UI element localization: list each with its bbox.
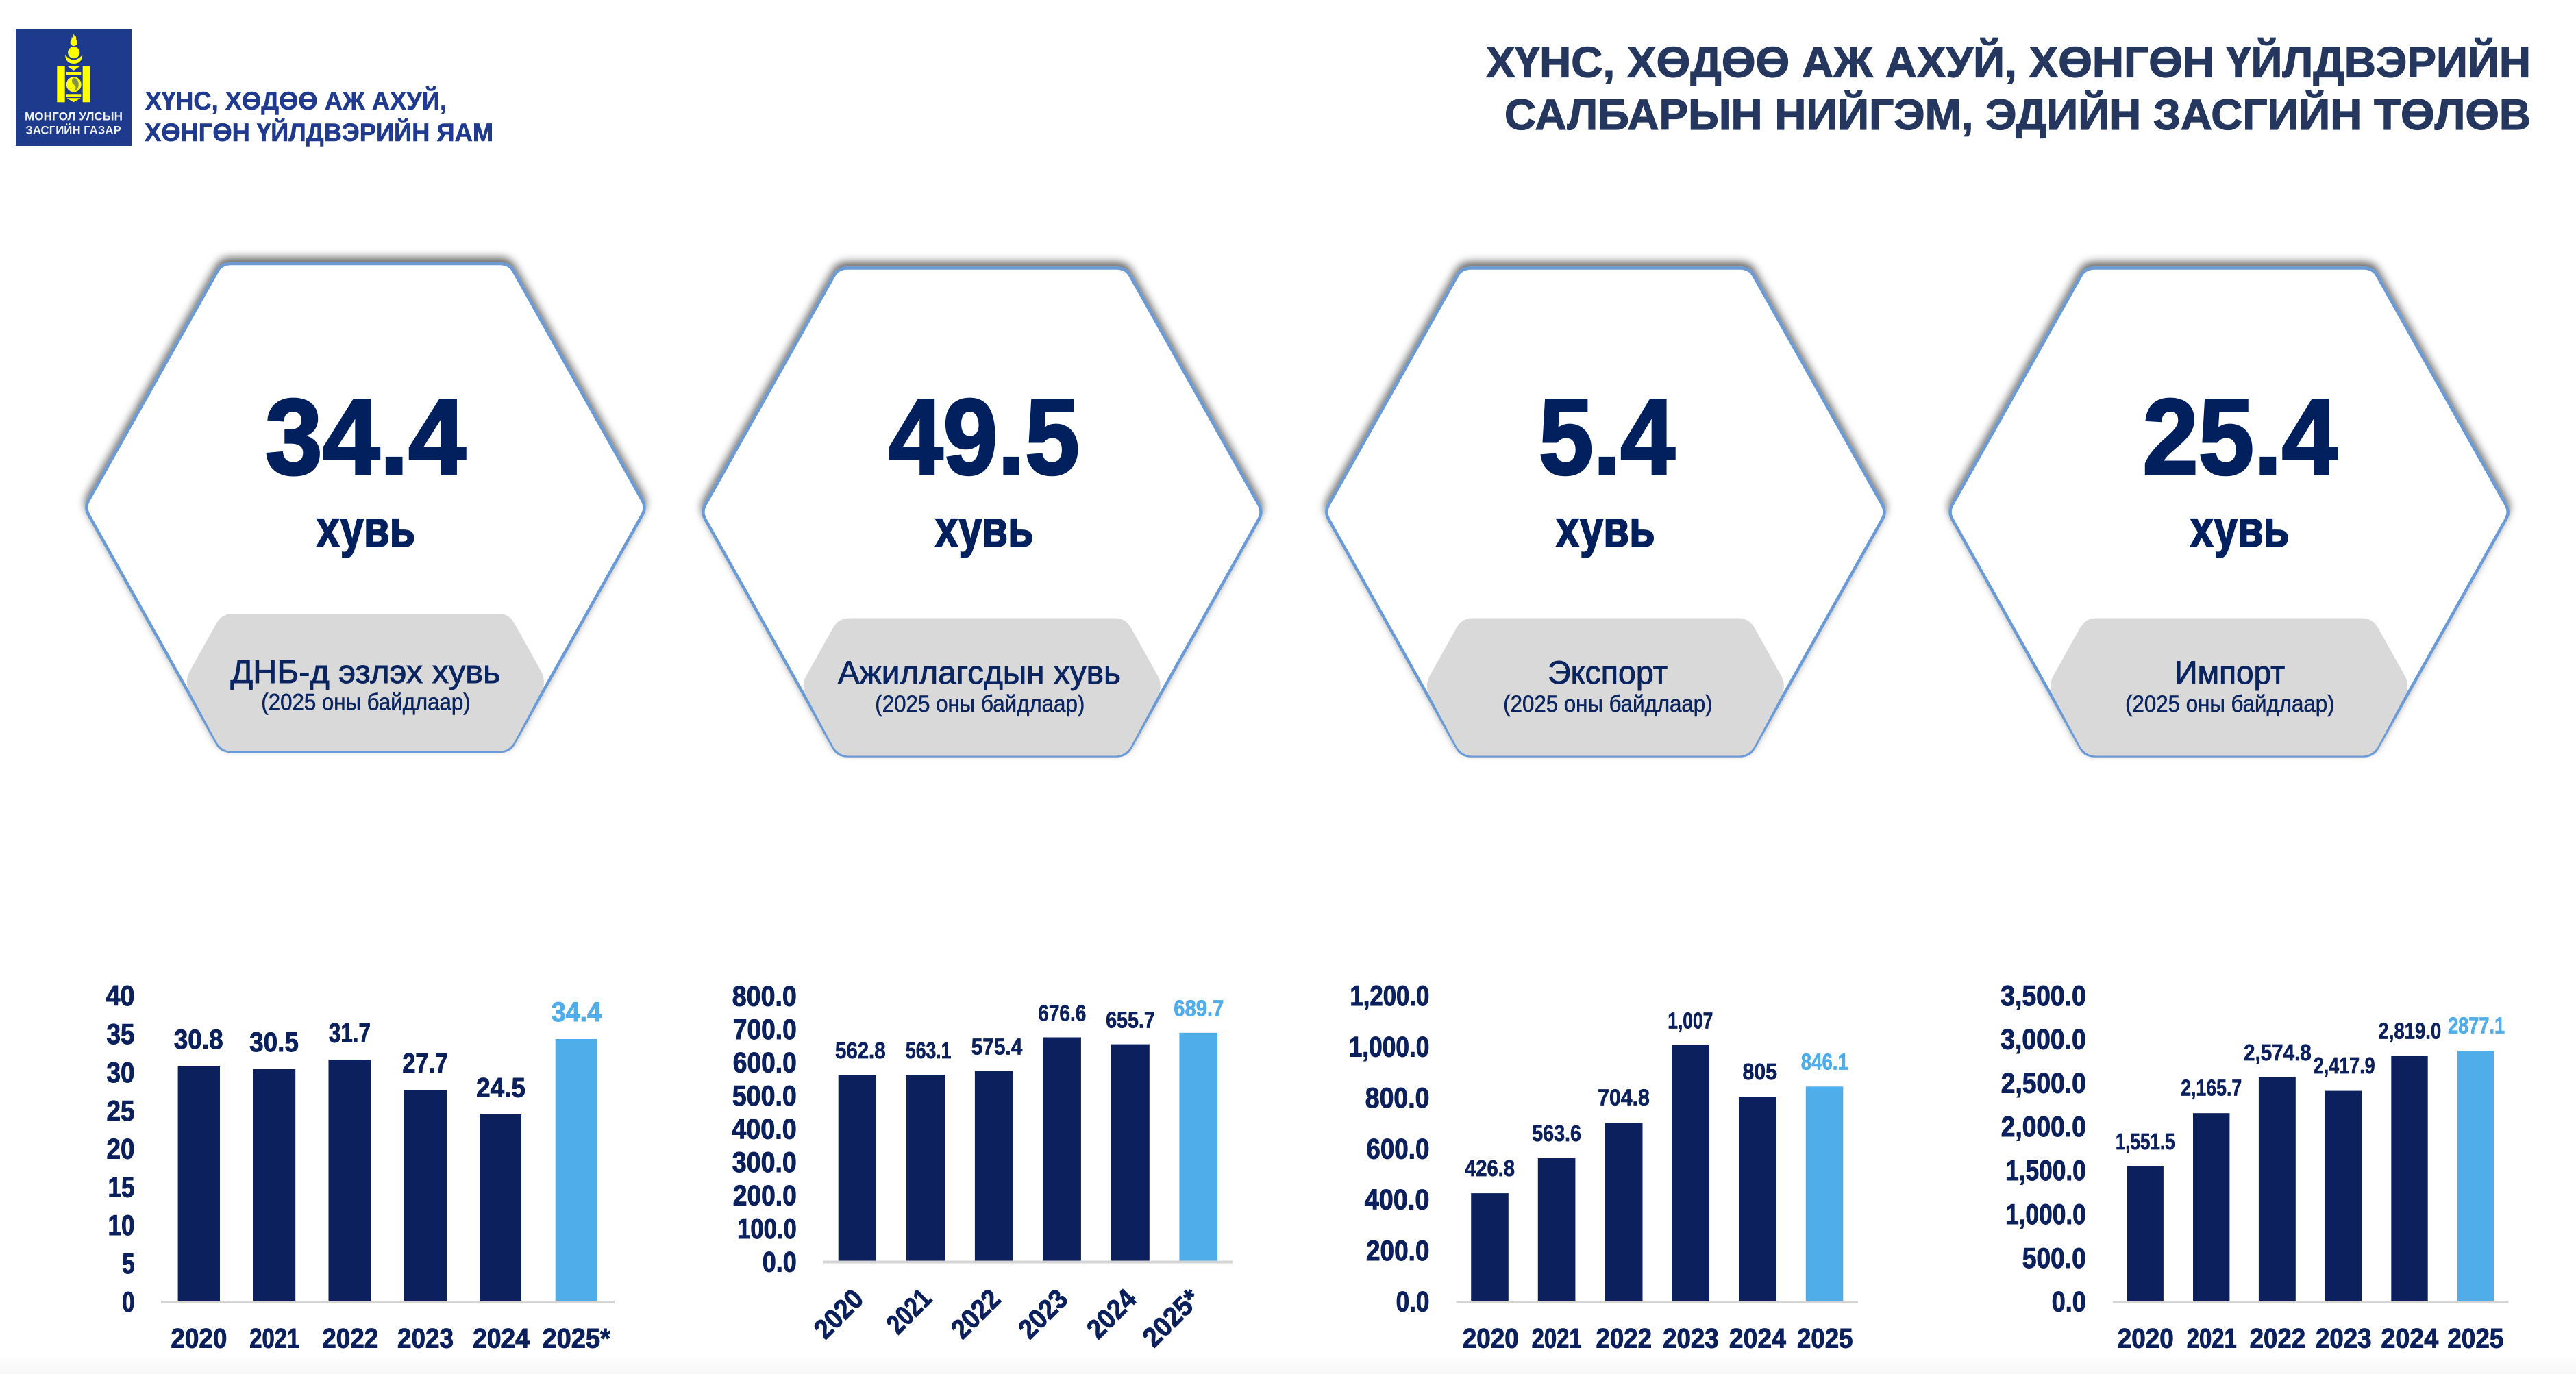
- year labels: 2023: [2316, 1323, 2372, 1353]
- title: САЛБАРЫН НИЙГЭМ, ЭДИЙН ЗАСГИЙН ТӨЛӨВ: [1504, 90, 2531, 139]
- year labels: 2021: [249, 1323, 299, 1353]
- y axis labels: 300.0: [732, 1146, 797, 1178]
- y axis labels: 0.0: [1396, 1285, 1429, 1317]
- y axis labels: 800.0: [732, 980, 797, 1012]
- bar chart: GDP share: [106, 979, 615, 1353]
- value labels: 2,165.7: [2181, 1075, 2242, 1100]
- rotated year labels: [808, 1283, 1206, 1353]
- value labels: 704.8: [1598, 1085, 1650, 1110]
- year labels: 2025: [1797, 1323, 1853, 1353]
- value labels: 805: [1742, 1059, 1777, 1084]
- value labels: 563.1: [906, 1038, 951, 1063]
- bars: [839, 1033, 1217, 1260]
- label plate: [1427, 618, 1784, 756]
- y axis labels: 3,500.0: [2001, 979, 2086, 1012]
- value labels: 563.6: [1532, 1121, 1581, 1146]
- logo text: [25, 110, 123, 137]
- axis line: [1456, 1301, 1858, 1303]
- value labels: 426.8: [1465, 1156, 1515, 1181]
- title: [1486, 38, 2531, 139]
- sublabel: (2025 оны байдлаар): [875, 691, 1085, 717]
- year labels: 2020: [2118, 1323, 2174, 1353]
- y axis labels: 500.0: [2022, 1242, 2086, 1274]
- hexagon outline: [703, 268, 1261, 756]
- unit: хувь: [1556, 500, 1655, 558]
- label plate: [2051, 618, 2407, 756]
- bar chart: export: [1349, 979, 1858, 1353]
- title: ХҮНС, ХӨДӨӨ АЖ АХУЙ, ХӨНГӨН ҮЙЛДВЭРИЙН: [1486, 38, 2531, 86]
- label: ДНБ-д эзлэх хувь: [230, 653, 500, 690]
- rotated year labels: 2022: [945, 1284, 1006, 1345]
- value labels: 575.4: [971, 1034, 1023, 1060]
- axis line: [161, 1301, 615, 1303]
- year labels: [171, 1323, 610, 1353]
- rotated year labels: 2021: [881, 1283, 938, 1340]
- year labels: 2021: [2187, 1323, 2237, 1353]
- axis line: [823, 1260, 1233, 1263]
- y axis labels: 200.0: [733, 1179, 797, 1212]
- label plate: [804, 618, 1161, 756]
- y axis labels: [2001, 979, 2086, 1317]
- y axis labels: 2,000.0: [2001, 1110, 2086, 1142]
- bar chart: import: [2001, 979, 2508, 1353]
- y axis labels: 700.0: [733, 1013, 797, 1045]
- y axis labels: 600.0: [1366, 1132, 1429, 1164]
- panel: GDP share hexagon: [86, 264, 644, 751]
- y axis labels: 200.0: [1366, 1234, 1429, 1266]
- value labels: 689.7: [1174, 996, 1224, 1021]
- y axis labels: 100.0: [737, 1212, 797, 1245]
- y axis labels: 40: [106, 979, 134, 1012]
- panel: import hexagon: [1950, 268, 2508, 756]
- value labels: 27.7: [402, 1048, 448, 1078]
- unit: хувь: [935, 500, 1034, 558]
- value labels: [174, 997, 602, 1103]
- rotated year labels: 2023: [1013, 1284, 1074, 1345]
- year labels: 2024: [2381, 1323, 2439, 1353]
- label: Экспорт: [1548, 654, 1668, 690]
- value labels: [835, 996, 1224, 1063]
- big number: 5.4: [1539, 377, 1675, 497]
- y axis labels: 5: [122, 1247, 134, 1279]
- year labels: 2020: [171, 1323, 227, 1353]
- sublabel: (2025 оны байдлаар): [2125, 691, 2335, 717]
- rotated year labels: 2020: [808, 1284, 869, 1345]
- logo text: МОНГОЛ УЛСЫН: [25, 110, 123, 123]
- y axis labels: 20: [107, 1133, 134, 1165]
- y axis labels: 3,000.0: [2001, 1023, 2086, 1055]
- year labels: 2023: [397, 1323, 454, 1353]
- y axis labels: 1,000.0: [1349, 1031, 1429, 1063]
- value labels: 2,417.9: [2314, 1053, 2375, 1078]
- value labels: 2877.1: [2448, 1013, 2505, 1038]
- hexagon outline: [1326, 268, 1884, 756]
- value labels: 2,574.8: [2244, 1040, 2312, 1065]
- rotated year labels: 2025*: [1137, 1284, 1206, 1353]
- y axis labels: 10: [108, 1209, 134, 1241]
- y axis labels: 600.0: [733, 1047, 797, 1079]
- year labels: 2024: [1729, 1323, 1787, 1353]
- value labels: 676.6: [1038, 1000, 1086, 1025]
- year labels: [1463, 1323, 1853, 1353]
- year labels: 2023: [1663, 1323, 1719, 1353]
- sublabel: (2025 оны байдлаар): [261, 690, 471, 716]
- value labels: [1465, 1008, 1848, 1181]
- value labels: 2,819.0: [2378, 1018, 2441, 1043]
- year labels: 2022: [2250, 1323, 2305, 1353]
- value labels: 30.5: [249, 1027, 299, 1058]
- value labels: 30.8: [174, 1025, 223, 1055]
- y axis labels: 30: [107, 1056, 134, 1088]
- value labels: 34.4: [552, 997, 602, 1027]
- rotated year labels: 2024: [1081, 1284, 1143, 1345]
- value labels: 846.1: [1801, 1049, 1848, 1074]
- label plate: [187, 614, 544, 751]
- y axis labels: 0.0: [2052, 1285, 2086, 1317]
- value labels: 655.7: [1106, 1007, 1155, 1032]
- value labels: [2116, 1013, 2505, 1154]
- label: Импорт: [2175, 654, 2285, 690]
- value labels: 1,551.5: [2116, 1129, 2175, 1154]
- year labels: 2021: [1532, 1323, 1582, 1353]
- panel: employment share hexagon: [703, 268, 1261, 756]
- y axis labels: [106, 979, 134, 1318]
- year labels: 2022: [1596, 1323, 1652, 1353]
- value labels: 562.8: [835, 1038, 886, 1063]
- y axis labels: 0: [122, 1286, 134, 1318]
- y axis labels: 35: [107, 1018, 134, 1050]
- logo: government of Mongolia emblem: [16, 29, 132, 146]
- year labels: [2118, 1323, 2503, 1353]
- hexagon outline: [86, 264, 644, 751]
- hexagon outline: [1950, 268, 2508, 756]
- unit: хувь: [317, 500, 415, 558]
- panel: export hexagon: [1326, 268, 1884, 756]
- y axis labels: 1,000.0: [2005, 1198, 2086, 1230]
- y axis labels: 25: [107, 1095, 134, 1127]
- year labels: 2020: [1463, 1323, 1519, 1353]
- y axis labels: 400.0: [732, 1113, 797, 1145]
- ministry name: ХӨНГӨН ҮЙЛДВЭРИЙН ЯАМ: [145, 118, 493, 147]
- big number: 34.4: [265, 377, 466, 497]
- bars: [2127, 1051, 2494, 1301]
- icon: soyombo emblem: [57, 34, 90, 102]
- axis line: [2113, 1301, 2508, 1303]
- logo text: ЗАСГИЙН ГАЗАР: [25, 124, 121, 137]
- label: Ажиллагсдын хувь: [838, 654, 1121, 690]
- sublabel: (2025 оны байдлаар): [1503, 691, 1713, 717]
- y axis labels: [1349, 979, 1429, 1317]
- ministry name: ХҮНС, ХӨДӨӨ АЖ АХУЙ,: [145, 86, 447, 115]
- year labels: 2022: [322, 1323, 378, 1353]
- y axis labels: 15: [108, 1171, 134, 1203]
- big number: 49.5: [889, 377, 1080, 497]
- ministry name: [145, 86, 493, 147]
- y axis labels: 1,200.0: [1350, 979, 1429, 1012]
- y axis labels: 1,500.0: [2005, 1154, 2086, 1186]
- y axis labels: 400.0: [1365, 1184, 1429, 1216]
- y axis labels: 0.0: [763, 1245, 797, 1278]
- bars: [1471, 1045, 1843, 1301]
- year labels: 2024: [473, 1323, 530, 1353]
- y axis labels: 2,500.0: [2001, 1066, 2086, 1099]
- bar chart: employment: [732, 980, 1233, 1353]
- year labels: 2025*: [543, 1323, 610, 1353]
- y axis labels: [732, 980, 797, 1278]
- year labels: 2025: [2447, 1323, 2503, 1353]
- big number: 25.4: [2142, 377, 2338, 497]
- bars: [178, 1039, 597, 1301]
- value labels: 1,007: [1668, 1008, 1713, 1033]
- unit: хувь: [2190, 500, 2290, 558]
- y axis labels: 500.0: [732, 1079, 797, 1112]
- value labels: 24.5: [476, 1073, 525, 1103]
- value labels: 31.7: [329, 1018, 371, 1048]
- y axis labels: 800.0: [1365, 1082, 1429, 1114]
